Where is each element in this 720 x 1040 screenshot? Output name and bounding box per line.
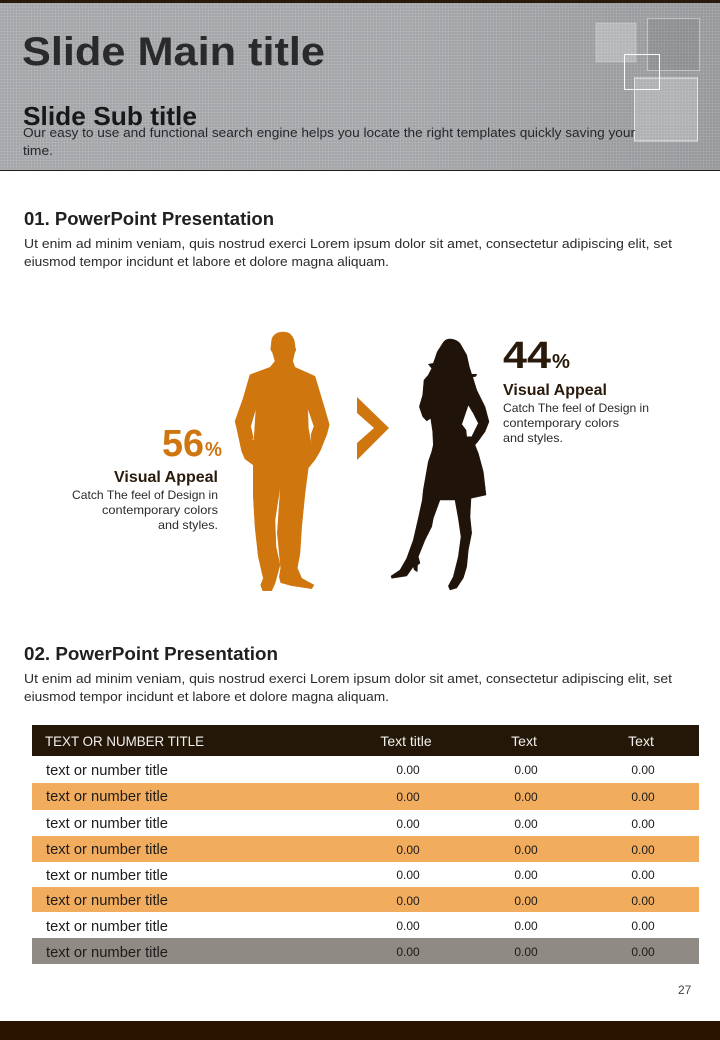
stat: 56 percent bbox=[72, 423, 222, 532]
stat label: Visual Appeal bbox=[114, 469, 218, 486]
table row 5: text or number title bbox=[46, 868, 168, 884]
table row 3: text or number title bbox=[46, 816, 168, 832]
section 1 text bbox=[24, 237, 673, 269]
table row 1: 0.00 bbox=[631, 763, 655, 777]
header description: time. bbox=[23, 143, 53, 158]
footer bar bbox=[0, 1021, 720, 1040]
stat description bbox=[72, 488, 218, 532]
table row 1: 0.00 bbox=[396, 763, 420, 777]
table row 2 bbox=[32, 783, 699, 810]
section 1 heading: 01. PowerPoint Presentation bbox=[24, 209, 274, 229]
table row 8: 0.00 bbox=[631, 945, 655, 959]
main title: Slide Main title bbox=[22, 30, 325, 74]
section 2 heading: 02. PowerPoint Presentation bbox=[24, 644, 278, 664]
stat: 56 percent: 56 bbox=[162, 423, 204, 465]
icon: female silhouette bbox=[391, 339, 489, 590]
stat description: contemporary colors bbox=[102, 503, 218, 517]
table row 1: 0.00 bbox=[514, 763, 538, 777]
table header row: Text bbox=[628, 733, 654, 749]
table row 4: text or number title bbox=[46, 842, 168, 858]
stat description: Catch The feel of Design in bbox=[72, 488, 218, 502]
stat description bbox=[503, 401, 649, 445]
stat label: Visual Appeal bbox=[503, 382, 607, 399]
table row 4: 0.00 bbox=[514, 843, 538, 857]
table row 8: 0.00 bbox=[396, 945, 420, 959]
stat description: Catch The feel of Design in bbox=[503, 401, 649, 415]
header description: Our easy to use and functional search engine helps you locate the right templates quickly saving your bbox=[23, 125, 636, 140]
table row 7: text or number title bbox=[46, 919, 168, 935]
table row 3 bbox=[46, 816, 655, 832]
table row 8: text or number title bbox=[46, 945, 168, 961]
table row 4 bbox=[32, 836, 699, 862]
table row 7 bbox=[46, 919, 655, 935]
table row 2: 0.00 bbox=[396, 790, 420, 804]
section 1 text: eiusmod tempor incidunt et labore et dolore magna aliquam. bbox=[24, 255, 389, 269]
table row 3: 0.00 bbox=[514, 817, 538, 831]
page number: 27 bbox=[678, 983, 692, 997]
section 2 text: Ut enim ad minim veniam, quis nostrud exerci Lorem ipsum dolor sit amet, consectetur adipiscing elit, set bbox=[24, 672, 673, 686]
stat: 44 percent: % bbox=[552, 351, 570, 373]
table row 5: 0.00 bbox=[514, 868, 538, 882]
table row 1 bbox=[46, 763, 655, 779]
sub title: Slide Sub title bbox=[23, 101, 197, 131]
table header row: TEXT OR NUMBER TITLE bbox=[45, 733, 204, 749]
table row 6: 0.00 bbox=[514, 894, 538, 908]
table row 7: 0.00 bbox=[631, 919, 655, 933]
table row 6 bbox=[32, 887, 699, 912]
table row 5: 0.00 bbox=[396, 868, 420, 882]
table row 2: 0.00 bbox=[514, 790, 538, 804]
data table bbox=[32, 725, 699, 964]
table row 6: 0.00 bbox=[396, 894, 420, 908]
stat description: and styles. bbox=[503, 431, 563, 445]
table row 3: 0.00 bbox=[396, 817, 420, 831]
section 2 text bbox=[24, 672, 673, 704]
table row 2: text or number title bbox=[46, 789, 168, 805]
table row 7: 0.00 bbox=[396, 919, 420, 933]
section 2 text: eiusmod tempor incidunt et labore et dolore magna aliquam. bbox=[24, 690, 389, 704]
table row 7: 0.00 bbox=[514, 919, 538, 933]
table row 5 bbox=[46, 868, 655, 884]
section 1 text: Ut enim ad minim veniam, quis nostrud exerci Lorem ipsum dolor sit amet, consectetur adipiscing elit, set bbox=[24, 237, 673, 251]
icon: chevron arrow bbox=[357, 397, 389, 460]
table row 2: 0.00 bbox=[631, 790, 655, 804]
stat: 44 percent: 44 bbox=[503, 335, 551, 377]
table row 4: 0.00 bbox=[396, 843, 420, 857]
table row 8: 0.00 bbox=[514, 945, 538, 959]
stat: 44 percent bbox=[503, 335, 649, 445]
table row 4: 0.00 bbox=[631, 843, 655, 857]
table header row bbox=[32, 725, 699, 756]
stat: 56 percent: % bbox=[205, 439, 222, 461]
decorative squares bbox=[596, 18, 700, 141]
table header row: Text bbox=[511, 733, 537, 749]
header description bbox=[23, 125, 636, 158]
table row 6: 0.00 bbox=[631, 894, 655, 908]
stat description: contemporary colors bbox=[503, 416, 619, 430]
icon: male silhouette bbox=[235, 332, 329, 591]
table row 6: text or number title bbox=[46, 893, 168, 909]
table row 8 bbox=[32, 938, 699, 964]
stat description: and styles. bbox=[158, 518, 218, 532]
table header row: Text title bbox=[380, 733, 432, 749]
table row 3: 0.00 bbox=[631, 817, 655, 831]
table row 5: 0.00 bbox=[631, 868, 655, 882]
header banner bbox=[0, 0, 720, 171]
table row 1: text or number title bbox=[46, 763, 168, 779]
